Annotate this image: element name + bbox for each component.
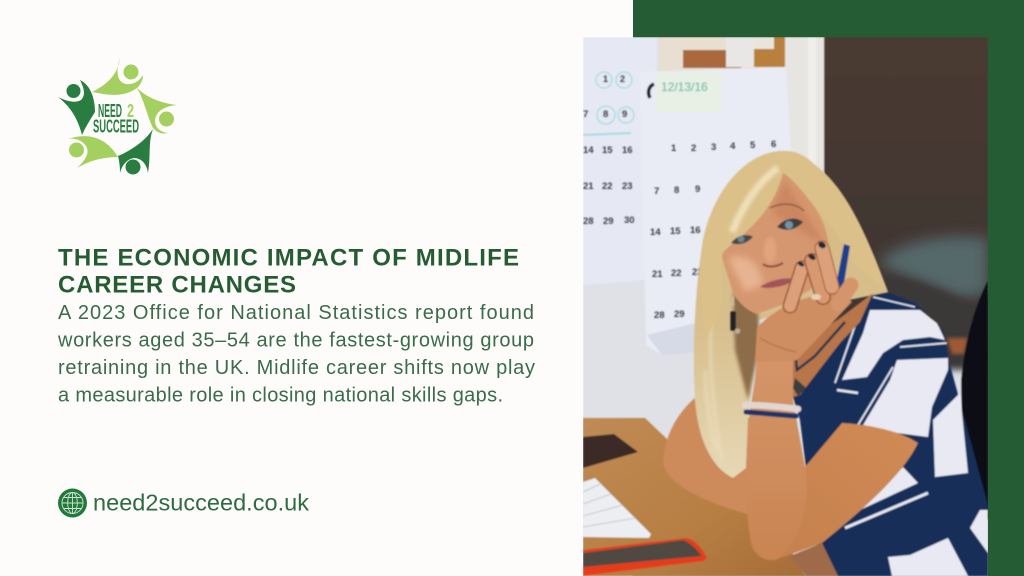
eyebrow bbox=[770, 204, 804, 211]
calendar: left sheet bbox=[583, 37, 657, 285]
lower wrist below bbox=[790, 543, 838, 576]
door frame bbox=[806, 38, 818, 165]
forearm bbox=[747, 360, 806, 560]
logo wordmark: 2 bbox=[127, 101, 134, 121]
heading: CAREER CHANGES bbox=[58, 271, 296, 298]
desk bbox=[583, 418, 806, 576]
calendar numbers: 30 bbox=[624, 215, 635, 226]
nose bbox=[763, 237, 783, 267]
calendar numbers: 23 bbox=[622, 181, 633, 192]
body text: workers aged 35–54 are the fastest-growing group bbox=[57, 330, 534, 352]
shirt thin stripes bbox=[835, 297, 947, 528]
neck and chest bbox=[793, 293, 873, 397]
calendar numbers: 9 bbox=[622, 109, 627, 120]
corkboard bbox=[659, 37, 785, 71]
right eye bbox=[777, 219, 803, 230]
shirt body bbox=[793, 288, 988, 576]
calendar numbers: 5 bbox=[750, 140, 756, 151]
phone bbox=[583, 538, 707, 576]
website link bbox=[58, 488, 309, 518]
fringe highlight bbox=[732, 168, 778, 232]
calendar numbers: 16 bbox=[622, 145, 633, 156]
calendar numbers: 9 bbox=[695, 184, 700, 195]
heading bbox=[58, 244, 519, 298]
shirt lower white panels bbox=[860, 393, 988, 576]
face bbox=[722, 172, 828, 314]
calendar numbers: 22 bbox=[671, 268, 682, 279]
earring bbox=[730, 296, 740, 334]
calendar numbers: 21 bbox=[652, 269, 663, 280]
calendar numbers: 14 bbox=[583, 145, 594, 156]
dark back wall bbox=[824, 37, 988, 337]
calendar numbers: 8 bbox=[674, 185, 679, 196]
hair strands bbox=[703, 327, 721, 450]
shirt sleeve white panels bbox=[842, 310, 948, 437]
logo wordmark: SUCCEED bbox=[93, 116, 139, 136]
logo: Need 2 Succeed bbox=[58, 58, 177, 174]
logo figure: right bbox=[137, 88, 177, 134]
green background panel bbox=[633, 0, 1024, 576]
logo figure: lower left bbox=[68, 136, 118, 168]
calendar black letter bbox=[649, 84, 654, 98]
calendar numbers: 14 bbox=[650, 227, 661, 238]
body text: retraining in the UK. Midlife career shifts now play bbox=[58, 357, 535, 379]
website address: need2succeed.co.uk bbox=[93, 490, 309, 516]
calendar numbers: 23 bbox=[692, 267, 703, 278]
photo background: wall bbox=[583, 37, 988, 576]
bed bbox=[878, 237, 988, 370]
wallet on desk bbox=[583, 434, 638, 468]
forehead shading bbox=[774, 186, 819, 239]
calendar: main sheet bbox=[640, 67, 792, 355]
hair back bbox=[693, 206, 889, 479]
icon: globe bbox=[58, 488, 87, 518]
logo wordmark bbox=[93, 101, 139, 136]
cheek highlight bbox=[728, 256, 763, 292]
body text bbox=[57, 302, 535, 407]
calendar numbers: 4 bbox=[730, 141, 736, 152]
chair bbox=[961, 280, 988, 520]
logo wordmark: NEED bbox=[98, 101, 122, 121]
heading: THE ECONOMIC IMPACT OF MIDLIFE bbox=[58, 244, 519, 272]
upper arm bbox=[775, 423, 918, 560]
calendar numbers: 7 bbox=[583, 109, 588, 120]
calendar numbers: 15 bbox=[670, 226, 681, 237]
calendar numbers: 29 bbox=[674, 309, 685, 320]
hair shadow by neck bbox=[733, 292, 760, 400]
hand bbox=[755, 248, 852, 362]
mouth bbox=[760, 278, 796, 288]
pen bbox=[836, 244, 850, 298]
bracelets bbox=[745, 405, 798, 416]
logo figure: top bbox=[92, 58, 143, 95]
calendar numbers bbox=[583, 74, 776, 321]
calendar note bbox=[656, 72, 721, 112]
calendar numbers: 2 bbox=[620, 74, 625, 84]
logo figure: upper left bbox=[58, 80, 95, 135]
keyboard bbox=[583, 478, 651, 538]
body text: a measurable role in closing national skills gaps. bbox=[58, 385, 503, 407]
far arm bbox=[663, 397, 755, 515]
necklace bbox=[795, 322, 845, 370]
ring bbox=[811, 294, 821, 300]
body text: A 2023 Office for National Statistics report found bbox=[58, 302, 534, 324]
calendar numbers: 8 bbox=[603, 109, 608, 120]
calendar numbers: 12/13/16 bbox=[661, 80, 708, 94]
calendar numbers: 2 bbox=[691, 143, 696, 154]
left eye bbox=[731, 235, 753, 244]
calendar numbers: 6 bbox=[771, 139, 776, 150]
calendar numbers: 7 bbox=[654, 186, 659, 197]
calendar cyan marks bbox=[583, 72, 634, 135]
calendar numbers: 3 bbox=[711, 142, 716, 153]
calendar numbers: 28 bbox=[654, 310, 665, 321]
calendar numbers: 21 bbox=[583, 181, 594, 192]
woman bbox=[663, 151, 988, 576]
calendar numbers: 22 bbox=[602, 181, 613, 192]
photo: woman at desk bbox=[583, 37, 988, 576]
calendar numbers: 28 bbox=[583, 216, 594, 227]
nails bbox=[797, 240, 827, 267]
calendar numbers: 1 bbox=[671, 143, 677, 154]
fringe bbox=[701, 151, 888, 340]
calendar numbers: 1 bbox=[603, 74, 608, 84]
calendar numbers: 29 bbox=[603, 216, 614, 227]
calendar numbers: 15 bbox=[602, 145, 613, 156]
calendar numbers: 16 bbox=[690, 225, 701, 236]
logo figure: bottom bbox=[118, 129, 153, 174]
